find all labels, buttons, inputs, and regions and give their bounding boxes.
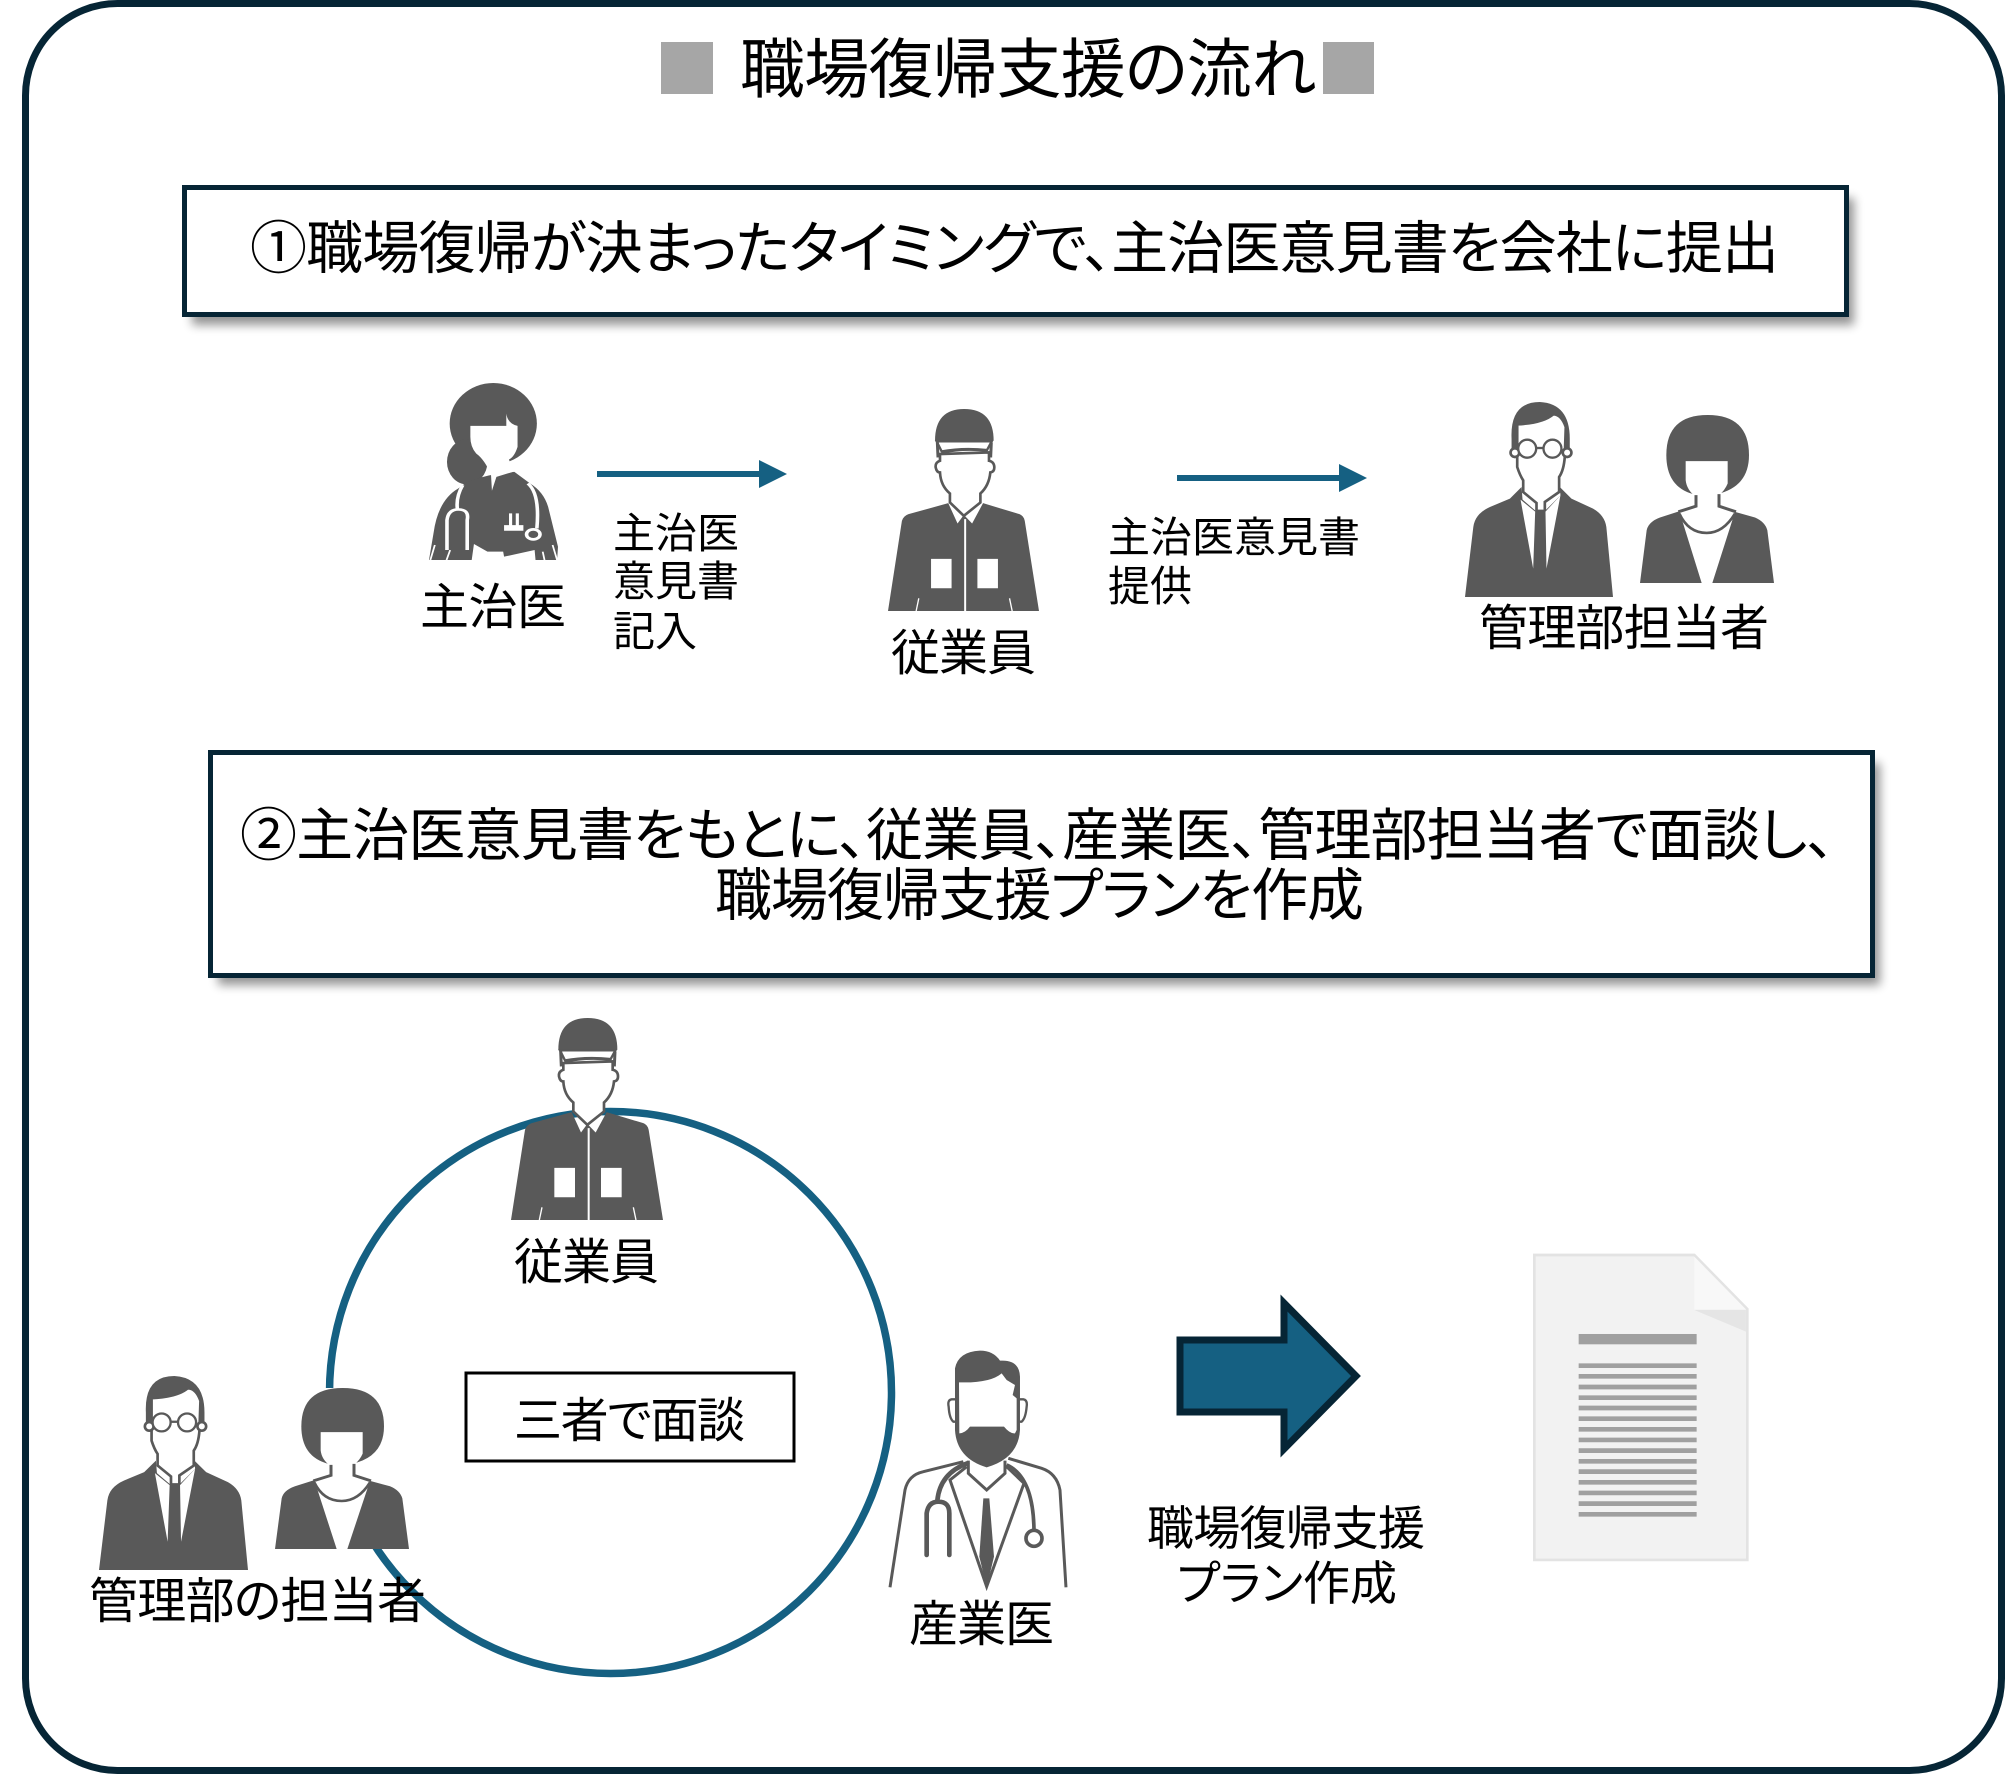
text: 主治医意見書提供 [1108, 514, 1360, 610]
arrow: employee to management [1177, 464, 1367, 492]
panel: step 1 heading: ①職場復帰が決まったタイミングで、主治医意見書を会社に提出 [250, 217, 1779, 281]
icon: document [1534, 1255, 1747, 1560]
panel: step 2 heading: ②主治医意見書をもとに、従業員、産業医、管理部担当者で面談し、 [240, 804, 1835, 868]
icon: employee [888, 409, 1039, 611]
panel: step 2 heading: 職場復帰支援プランを作成 [715, 864, 1364, 928]
title: 職場復帰支援の流れ: 職場復帰支援の流れ [740, 33, 1316, 106]
label: 管理部担当者: 管理部担当者 [1479, 602, 1769, 656]
box: 三者で面談: 三者で面談 [514, 1395, 745, 1448]
text: 主治医意見書記入: 記入 [613, 608, 697, 655]
text: 主治医意見書記入 [613, 510, 739, 655]
label: 従業員: 従業員 [514, 1236, 659, 1290]
label: 管理部の担当者: 管理部の担当者 [89, 1575, 426, 1629]
label: 主治医: 主治医 [420, 581, 566, 635]
icon: attending doctor (female) [429, 383, 558, 560]
text: 職場復帰支援プラン作成 [1147, 1502, 1425, 1610]
arrow: doctor to employee [597, 460, 787, 488]
icon: management staff on circle [99, 1376, 409, 1570]
text: 職場復帰支援プラン作成: プラン作成 [1177, 1557, 1397, 1610]
icon: occupational physician [890, 1351, 1066, 1587]
arrow: large block arrow [1180, 1303, 1356, 1449]
icon: management staff [1465, 402, 1774, 597]
diagram: three-party meeting circle [330, 1112, 892, 1674]
text: 主治医意見書記入: 主治医 [613, 510, 739, 557]
panel: step 1 heading [184, 188, 1854, 325]
icon: employee on circle [511, 1018, 663, 1220]
text: 職場復帰支援プラン作成: 職場復帰支援 [1147, 1502, 1425, 1555]
text: 主治医意見書提供: 提供 [1108, 563, 1192, 610]
panel: step 2 heading [210, 752, 1880, 985]
label: 従業員: 従業員 [891, 627, 1036, 681]
text: 主治医意見書記入: 意見書 [613, 558, 739, 605]
text: 主治医意見書提供: 主治医意見書 [1108, 514, 1360, 561]
box: 三者で面談 [466, 1373, 794, 1461]
label: 産業医: 産業医 [909, 1598, 1054, 1652]
